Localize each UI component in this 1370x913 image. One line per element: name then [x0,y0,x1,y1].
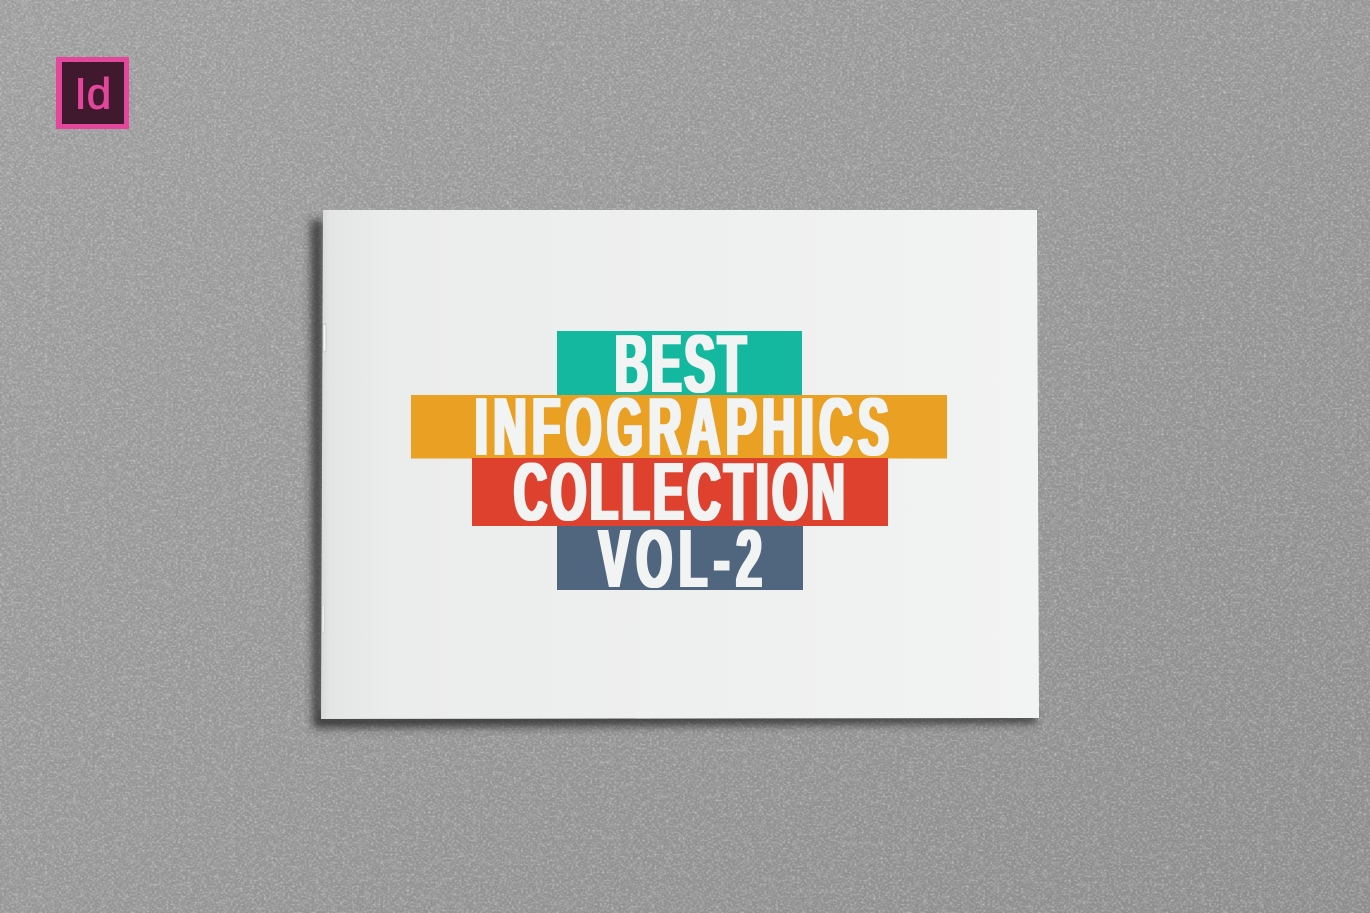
icon: upper staple [323,324,326,352]
title band: VOL-2: VOL-2 [599,513,762,606]
icon: InDesign logo: Id [74,70,111,118]
title block [411,318,947,606]
title band: VOL-2 [557,513,803,606]
icon: lower staple [322,605,324,633]
title band: BEST: BEST [615,318,746,411]
panel: brochure cover [321,210,1039,719]
brochure drop shadow [311,220,1036,728]
icon: InDesign logo [56,57,129,129]
title band: COLLECTION: COLLECTION [514,446,845,539]
title band: BEST [557,318,802,411]
title band: INFOGRAPHICS: INFOGRAPHICS [475,381,889,474]
